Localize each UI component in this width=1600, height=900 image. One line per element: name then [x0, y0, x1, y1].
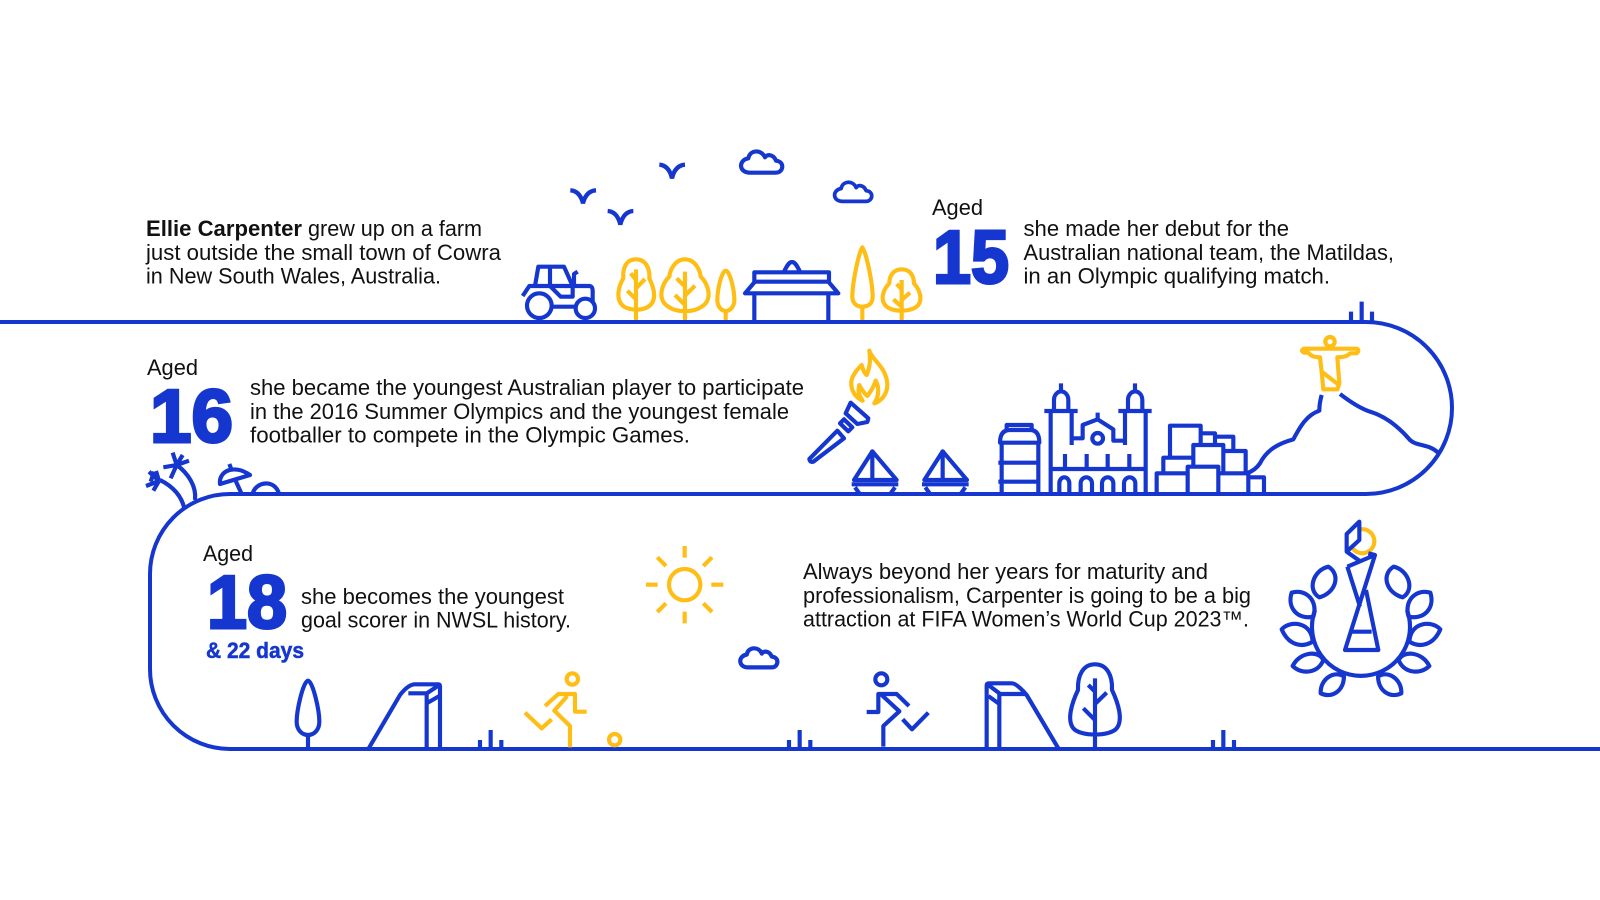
text block: Olympics: in the 2016 Summer Olympics and the youngest female — [250, 399, 789, 424]
icon: small cloud — [835, 182, 872, 201]
label: Aged 15: Aged — [932, 195, 983, 220]
icon: goal — [368, 684, 440, 749]
icon: grass top right — [1351, 302, 1372, 322]
text block: intro: in New South Wales, Australia. — [146, 264, 441, 288]
number: 16: 16 — [150, 374, 233, 458]
text block: debut: Australian national team, the Matildas, — [1024, 240, 1394, 265]
icon: birds — [570, 165, 685, 225]
text block: World Cup: Always beyond her years for maturity and — [803, 559, 1208, 584]
sailboat — [922, 450, 969, 494]
text block: World Cup: attraction at FIFA Women’s World Cup 2023™. — [803, 606, 1249, 632]
text block: intro — [145, 216, 502, 288]
text block: Olympics — [250, 375, 804, 448]
text block: intro: Ellie Carpenter — [146, 216, 302, 241]
icon: trophy and wreath — [1282, 522, 1440, 695]
icon: beach scene — [146, 453, 279, 508]
number: 15: 15 — [933, 215, 1009, 299]
text block: Olympics: she became the youngest Australian player to participate — [250, 375, 804, 400]
text block: NWSL: she becomes the youngest — [301, 584, 564, 609]
icon: cloud — [741, 151, 782, 173]
text block: NWSL — [301, 584, 571, 632]
handle — [809, 403, 868, 462]
icon: Christ the Redeemer — [1302, 337, 1358, 389]
icon: yellow tree — [618, 259, 654, 320]
icon: Corcovado mountain — [1247, 337, 1439, 473]
icon: grass — [480, 730, 501, 749]
text block: debut: in an Olympic qualifying match. — [1024, 264, 1330, 288]
tower — [998, 425, 1040, 494]
text block: intro: grew up on a farm — [308, 216, 482, 241]
icon: tree — [1070, 664, 1120, 748]
icon: barn — [745, 262, 838, 320]
icon: cloud lower — [740, 648, 777, 667]
label: & 22 days: & 22 days — [206, 638, 304, 663]
icon: blue player — [867, 673, 928, 747]
church — [1044, 383, 1152, 494]
text block: debut: she made her debut for the — [1024, 216, 1289, 241]
icon: torch — [809, 351, 887, 462]
buildings — [1157, 426, 1264, 494]
number: 18: 18 — [207, 560, 287, 644]
flame — [851, 351, 887, 403]
text block: World Cup: professionalism, Carpenter is going to be a big — [803, 583, 1251, 608]
icon: small yellow tree — [883, 269, 920, 320]
icon: slim yellow tree — [717, 271, 734, 320]
icon: slim tree — [297, 681, 319, 749]
icon: yellow player — [525, 673, 587, 747]
label: Aged 18: Aged — [203, 541, 253, 566]
wreath — [1282, 567, 1440, 695]
text block: intro: just outside the small town of Cowra — [145, 240, 502, 265]
icon: grass — [1213, 730, 1234, 748]
icon: goal — [987, 683, 1058, 748]
sailboat — [852, 450, 898, 494]
label: Aged 16: Aged — [147, 355, 198, 380]
icon: Rio skyline — [852, 383, 1264, 494]
text block: World Cup — [803, 559, 1251, 632]
bottom scene left — [297, 673, 620, 749]
icon: round yellow tree — [661, 259, 709, 320]
text block: debut — [1024, 216, 1394, 288]
icon: tall yellow tree — [852, 247, 873, 320]
text block: NWSL: goal scorer in NWSL history. — [301, 608, 571, 632]
trophy — [1345, 522, 1378, 650]
icon: grass — [789, 730, 810, 748]
ring — [1353, 529, 1374, 553]
icon: sun — [646, 546, 723, 623]
icon: ball — [609, 734, 620, 745]
text block: Olympics: footballer to compete in the Olympic Games. — [250, 422, 690, 448]
bottom scene right — [789, 664, 1234, 748]
timeline path — [0, 322, 1600, 749]
farm scene — [523, 151, 920, 320]
icon: tractor — [523, 267, 595, 318]
